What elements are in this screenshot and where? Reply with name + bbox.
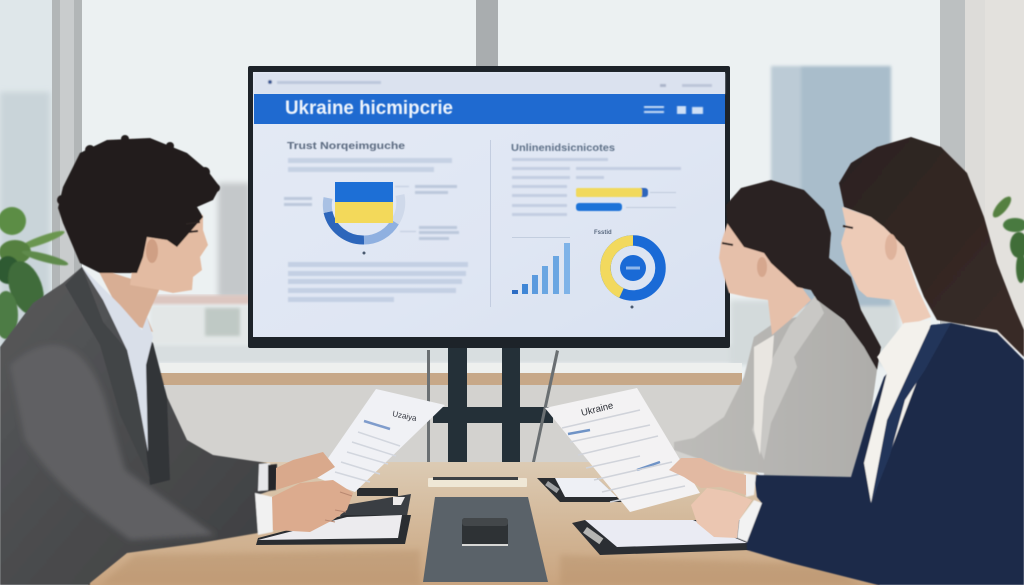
right woman eye (843, 226, 853, 228)
man sleeve highlight (10, 345, 215, 540)
display monitor (248, 66, 730, 348)
left column heading: Trust Norqeimguche (287, 140, 405, 152)
woman on the right (737, 137, 1024, 585)
man eye and brow (186, 222, 200, 232)
window sill (160, 363, 742, 385)
man ear (146, 239, 158, 263)
right woman upper hand (669, 458, 746, 495)
woman in the middle (674, 180, 881, 482)
browser bar (254, 73, 725, 94)
window mullions (52, 0, 1024, 350)
right woman hair (839, 137, 1024, 357)
screen title: Ukraine hicmipcrie (285, 98, 453, 119)
monitor stand (427, 346, 559, 462)
wall below window (165, 385, 745, 463)
man lower cuff (255, 493, 273, 535)
screen (253, 72, 725, 337)
right woman lapel (871, 323, 951, 503)
table wood streaks (100, 550, 860, 585)
left hand-held document (315, 389, 445, 492)
right woman lower cuff (737, 500, 762, 542)
man suit (0, 267, 272, 585)
middle woman neck and face (719, 215, 811, 335)
flag chart (327, 182, 401, 254)
right woman upper cuff (744, 473, 756, 497)
header bar (254, 94, 725, 124)
man neck (97, 268, 160, 332)
man inner jacket shadow (143, 343, 170, 485)
man face (130, 215, 208, 293)
man upper hand (276, 452, 335, 490)
phone on mat (462, 518, 508, 546)
middle woman lapel (752, 295, 824, 460)
right intro text (512, 158, 681, 216)
donut chart (594, 230, 660, 308)
header icons (644, 106, 703, 114)
man on the left (0, 135, 277, 585)
middle woman jacket (674, 295, 877, 482)
progress bars (576, 188, 676, 211)
right hand-held document (545, 388, 700, 512)
clipboard centre right (537, 478, 622, 502)
clipboard left (256, 515, 411, 545)
centre table mat (423, 497, 548, 582)
right woman neck and face (841, 207, 931, 327)
plant right (990, 194, 1024, 283)
plant left (0, 207, 69, 339)
middle woman eye (722, 243, 733, 245)
middle woman ear (757, 257, 767, 277)
flag chart labels (284, 185, 459, 240)
building on the right (771, 66, 891, 306)
conference table (88, 462, 880, 585)
right woman jacket (746, 323, 1024, 585)
left paragraph text (288, 262, 468, 302)
left hand-held document: Uzaiya (392, 409, 418, 423)
left intro text (288, 158, 452, 172)
right hand-held document: Ukraine (580, 400, 615, 419)
monitor bezel (248, 66, 730, 348)
Ukrainian flag (335, 182, 393, 202)
middle woman hair and ponytail (726, 180, 881, 370)
folder left upper (340, 488, 411, 516)
man lapel (65, 267, 150, 480)
column divider (490, 140, 491, 307)
right woman lower hand (691, 488, 752, 538)
right column heading: Unlinenidsicnicotes (511, 142, 615, 154)
man shirt (82, 267, 153, 452)
right woman shirt (864, 320, 931, 503)
donut chart: Fsstid (594, 230, 612, 236)
man hair (57, 135, 220, 273)
middle woman shirt (754, 335, 774, 455)
man upper cuff and watch (258, 463, 270, 491)
tablet on table (428, 477, 527, 487)
right woman ear (885, 234, 897, 260)
ring segments (327, 195, 401, 240)
bar chart (512, 237, 570, 294)
clipboard right (572, 520, 750, 555)
man lower hand (272, 480, 353, 532)
